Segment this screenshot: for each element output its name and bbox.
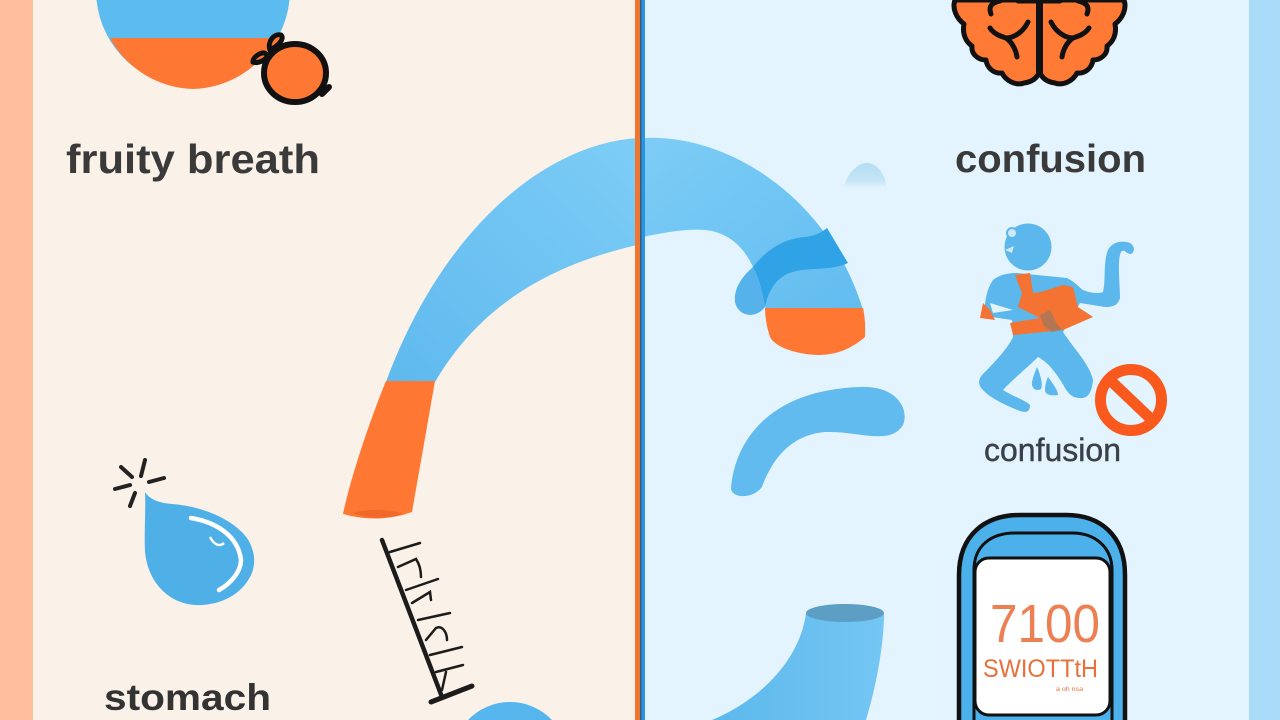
label: confusion small: confusion (984, 432, 1121, 468)
figure arm gap (990, 303, 1013, 313)
icon: fruity breath droplet with fruit (96, 0, 329, 102)
icon: brain (954, 0, 1125, 84)
central curved tube, right half (642, 138, 865, 355)
center divider line (635, 0, 645, 720)
figure head (1004, 224, 1052, 270)
meter screen (975, 558, 1110, 715)
blue circle at bottom (468, 702, 552, 720)
meter label: SWIOTTtH (983, 655, 1098, 683)
figure small drops (1032, 367, 1058, 395)
small pale dome (843, 163, 887, 188)
meter small print: a oh nsa (1056, 687, 1084, 693)
heading: fruity breath: fruity breath (66, 136, 320, 182)
heading: stomach: stomach (104, 677, 271, 718)
blue curved blob (731, 387, 905, 496)
figure chest detail (1040, 310, 1062, 332)
icon: water drop with sparks (115, 460, 254, 605)
figure orange harness (980, 273, 1093, 335)
icon: prohibition sign (1100, 370, 1162, 430)
lower right blue tube (712, 604, 884, 720)
meter body (959, 515, 1125, 720)
icon: glucose meter (959, 515, 1125, 720)
panel: right background (640, 0, 1280, 720)
meter reading: 7100 (990, 594, 1100, 654)
panel: left background (0, 0, 636, 720)
heading: confusion: confusion (955, 138, 1146, 181)
icon: confused figure (979, 224, 1134, 412)
central curved tube, left half (343, 138, 637, 519)
icon: ruler (382, 540, 472, 702)
meter inner bezel (974, 533, 1112, 720)
figure body and limbs (979, 242, 1134, 412)
